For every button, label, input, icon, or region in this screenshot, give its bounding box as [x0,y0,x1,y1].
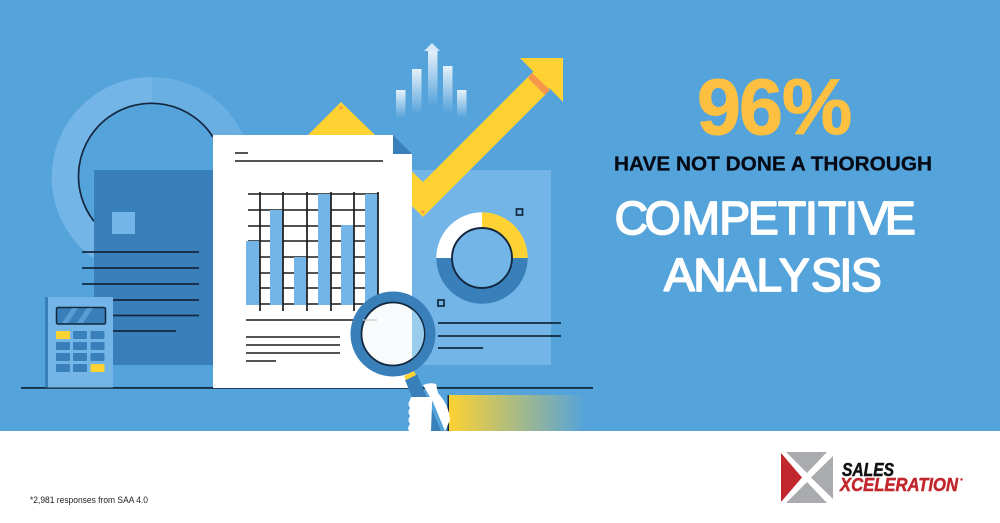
donut chart [436,212,528,304]
footnote: *2,981 responses from SAA 4.0 [30,495,148,505]
logo: Sales Xceleration: XCELERATION [839,475,959,495]
icon: rising bars with arrow [396,43,466,118]
statistic: 96%: 96% [697,62,852,151]
panel: white report document [213,135,412,388]
heading: competitive: COMPETITIVE [615,192,916,244]
heading: analysis: ANALYSIS [664,249,882,301]
panel: light blue chart card [412,170,561,365]
large background donut [52,77,243,258]
floor gradient bar [448,395,585,431]
logo: Sales Xceleration: SALES [842,460,894,480]
bar chart on document [246,192,378,311]
subheading: HAVE NOT DONE A THOROUGH [614,152,932,176]
calculator icon [45,297,113,388]
dark blue back sheet [82,170,214,365]
icon: yellow diamond [308,102,375,135]
logo: Sales Xceleration [781,452,963,503]
arrow: yellow rising trend [395,58,563,217]
icon: magnifying glass held in hand [356,297,450,431]
ground line [21,387,593,389]
